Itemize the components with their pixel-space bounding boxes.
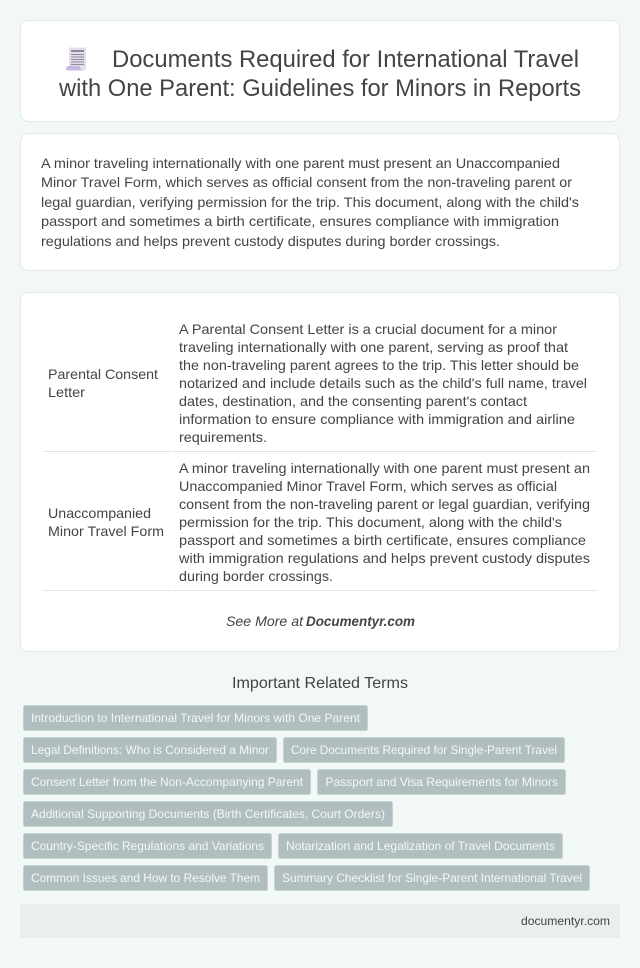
row text: Parental Consent Letter description: information to ensure compliance with immigration and airline (179, 411, 575, 427)
row text: Parental Consent Letter description (179, 321, 587, 445)
tag: Passport and Visa Requirements for Minors (326, 775, 558, 789)
summary text: A minor traveling internationally with one parent must present an Unaccompanied (41, 155, 560, 171)
tag (24, 802, 392, 826)
see more link: Documentyr.com (306, 613, 415, 629)
tag: Country-Specific Regulations and Variations (31, 839, 264, 853)
row text: Parental Consent Letter description: requirements. (179, 429, 267, 445)
tag (278, 834, 562, 858)
row text: Unaccompanied Minor Travel Form description: with immigration regulations and helps prevent custody disputes (178, 550, 590, 566)
row label: Parental Consent Letter (48, 366, 158, 400)
related terms tags (24, 706, 590, 890)
see more link (226, 613, 415, 629)
row text: Parental Consent Letter description: notarized and include details such as the child's full name, travel (179, 375, 587, 391)
row text: Parental Consent Letter description: traveling internationally with one parent, serving as proof that (179, 339, 568, 355)
title: with One Parent: Guidelines for Minors in Reports (58, 75, 581, 102)
see more link: See More at (226, 613, 304, 629)
row text: Unaccompanied Minor Travel Form description: A minor traveling internationally with one parent must present an (179, 460, 590, 476)
row label: Parental Consent Letter: Parental Consent (48, 366, 158, 382)
icon: document scroll (66, 48, 86, 70)
summary text: regulations and helps prevent custody disputes during border crossings. (41, 233, 500, 249)
row label: Parental Consent Letter: Letter (48, 384, 85, 400)
heading: Important Related Terms: Important Related Terms (232, 675, 408, 692)
footer: documentyr.com (521, 914, 610, 928)
tag: Core Documents Required for Single-Parent Travel (291, 743, 557, 757)
tag: Consent Letter from the Non-Accompanying Parent (31, 775, 304, 789)
title (58, 46, 581, 102)
tag: Legal Definitions: Who is Considered a Minor (31, 743, 269, 757)
row text: Unaccompanied Minor Travel Form description: consent from the non-traveling parent or legal guardian, verifying (179, 496, 590, 512)
tag (24, 866, 268, 890)
row text: Unaccompanied Minor Travel Form description: passport and sometimes a birth certificate, ensures compliance (179, 532, 586, 548)
tag: Introduction to International Travel for Minors with One Parent (31, 711, 361, 725)
summary text: passport and sometimes a birth certificate, ensures compliance with immigration (41, 213, 559, 229)
row text: Unaccompanied Minor Travel Form description: permission for the trip. This document, along with the child's (179, 514, 562, 530)
row text: Parental Consent Letter description: A Parental Consent Letter is a crucial document for a minor (179, 321, 557, 337)
row text: Unaccompanied Minor Travel Form description: Unaccompanied Minor Travel Form, which serves as official (179, 478, 557, 494)
tag: Notarization and Legalization of Travel Documents (286, 839, 555, 853)
tag (24, 738, 276, 762)
tag (318, 770, 566, 794)
tag (24, 834, 272, 858)
summary text (41, 155, 579, 249)
row text: Parental Consent Letter description: dates, destination, and the consenting parent's contact (179, 393, 527, 409)
tag: Summary Checklist for Single-Parent International Travel (282, 871, 582, 885)
tag: Additional Supporting Documents (Birth Certificates, Court Orders) (31, 807, 385, 821)
footer (20, 904, 620, 938)
title: Documents Required for International Travel (112, 46, 579, 73)
summary text: legal guardian, verifying permission for the trip. This document, along with the child's (41, 194, 579, 210)
row label: Unaccompanied Minor Travel Form (48, 505, 164, 539)
tag (24, 706, 368, 730)
row text: Unaccompanied Minor Travel Form description (178, 460, 590, 584)
row label: Unaccompanied Minor Travel Form: Unaccompanied (48, 505, 151, 521)
panel: title header (20, 20, 620, 122)
row text: Unaccompanied Minor Travel Form description: during border crossings. (179, 568, 333, 584)
tag (284, 738, 564, 762)
panel: documents table (20, 292, 620, 652)
panel: summary paragraph (20, 134, 620, 270)
tag: Common Issues and How to Resolve Them (31, 871, 260, 885)
row text: Parental Consent Letter description: the non-traveling parent agrees to the trip. This letter should be (179, 357, 579, 373)
summary text: Minor Travel Form, which serves as official consent from the non-traveling parent or (41, 174, 572, 190)
row label: Unaccompanied Minor Travel Form: Minor Travel Form (48, 523, 164, 539)
tag (274, 866, 590, 890)
tag (24, 770, 310, 794)
